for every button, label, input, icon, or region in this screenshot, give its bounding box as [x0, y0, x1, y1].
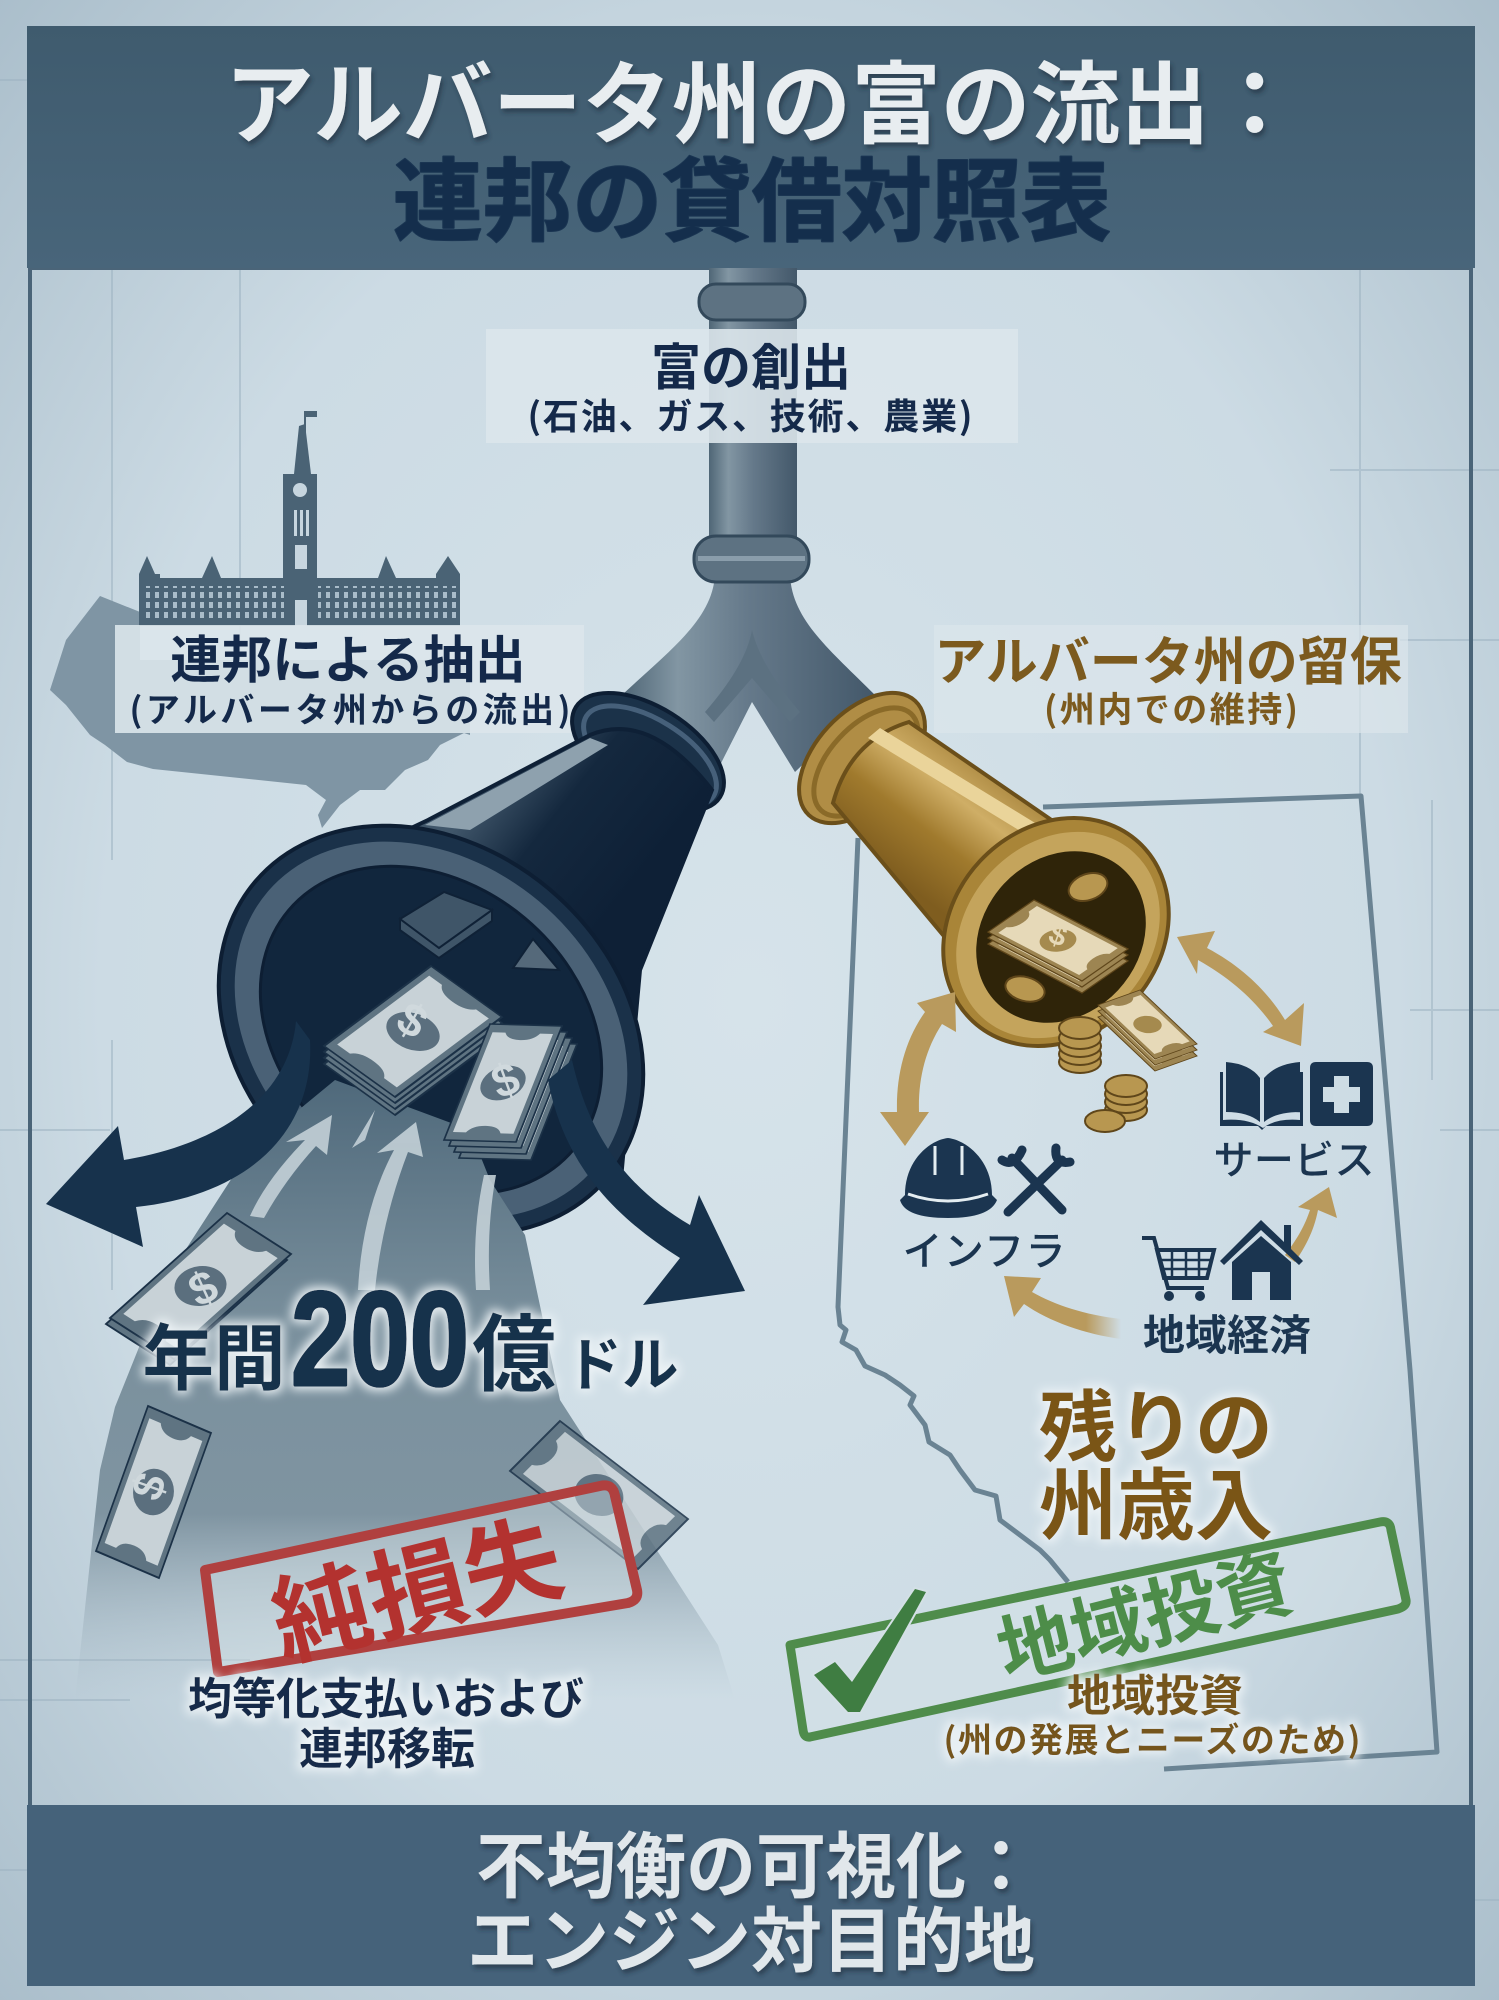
title line 2: 連邦の貸借対照表	[393, 129, 1111, 259]
amount: 20 billion dollars per year: 億	[472, 1288, 556, 1409]
left outflow arrow	[46, 1021, 310, 1247]
label: alberta retention	[934, 620, 1408, 733]
icon: medical cross	[1310, 1062, 1373, 1126]
caption: equalization: 連邦移転	[299, 1713, 475, 1777]
gold alberta pipe	[775, 670, 1215, 1132]
pipe body	[260, 729, 712, 1190]
services icons	[1220, 1062, 1373, 1130]
stamp: regional investment: 地域投資	[985, 1523, 1302, 1701]
caption: regional investment	[944, 1660, 1360, 1762]
heading: remaining revenue: 残りの	[1039, 1366, 1273, 1478]
icon: book	[1220, 1062, 1303, 1130]
check mark	[814, 1589, 926, 1712]
right outflow arrow	[548, 1060, 745, 1305]
falling bills: $	[180, 1259, 226, 1317]
gold pipe mouth	[897, 772, 1215, 1092]
label: wealth creation	[486, 328, 1018, 443]
gold cash stack: $	[1044, 917, 1072, 954]
icon: wrench	[1002, 1148, 1070, 1212]
alberta outline	[838, 796, 1437, 1769]
heading: remaining revenue: 州歳入	[1039, 1444, 1273, 1556]
canada map silhouette	[50, 596, 470, 828]
falling bills: $	[122, 1467, 177, 1506]
label: federal extraction: (アルバータ州からの流出)	[130, 683, 570, 732]
header banner	[27, 26, 1475, 268]
amount: 20 billion dollars per year: 200	[291, 1265, 469, 1414]
amount: 20 billion dollars per year: 年間	[142, 1300, 286, 1405]
gold cycle arrows	[880, 931, 1337, 1262]
central wealth pipe	[622, 268, 875, 775]
hat brim detail	[908, 1146, 988, 1201]
icon: cart	[1142, 1238, 1214, 1301]
dark curved arrows	[46, 1021, 745, 1305]
label: alberta retention: (州内での維持)	[1044, 682, 1298, 733]
bills in mouth: $	[484, 1051, 526, 1109]
icon: house	[1220, 1220, 1303, 1300]
caption: equalization: 均等化支払いおよび	[188, 1663, 584, 1727]
frame	[30, 268, 1471, 1808]
stamp: net loss: 純損失	[255, 1479, 575, 1688]
caption: regional investment: 地域投資	[1067, 1660, 1243, 1724]
economy label: 地域経済	[1143, 1302, 1311, 1363]
arrow up right	[1285, 1187, 1337, 1262]
dark federal pipe	[137, 669, 744, 1319]
icon: hard hat	[900, 1138, 997, 1218]
label: wealth creation: (石油、ガス、技術、農業)	[528, 388, 972, 440]
arrow bottom left	[1004, 1276, 1121, 1339]
light upward arrows	[250, 1110, 496, 1290]
label: wealth creation: 富の創出	[651, 328, 851, 400]
footer line 2: エンジン対目的地	[467, 1885, 1035, 1987]
money beam	[75, 1080, 735, 1700]
parliament building	[139, 411, 460, 626]
caption: equalization	[188, 1663, 584, 1777]
services label: サービス	[1214, 1128, 1374, 1186]
infrastructure icons	[900, 1138, 1070, 1218]
economy icons	[1142, 1220, 1303, 1301]
gold pipe collar	[775, 670, 949, 846]
amount: 20 billion dollars per year	[142, 1265, 678, 1414]
arrow left	[880, 992, 956, 1146]
title line 1: アルバータ州の富の流出：	[224, 32, 1300, 162]
label: federal extraction	[115, 619, 584, 733]
amount: 20 billion dollars per year: ドル	[566, 1318, 678, 1402]
arrow top right	[1177, 931, 1304, 1046]
label: federal extraction: 連邦による抽出	[170, 619, 526, 693]
stamp: regional investment	[790, 1522, 1406, 1737]
pipe mouth	[137, 741, 725, 1319]
coin stacks	[1059, 1017, 1147, 1132]
gold pipe body	[833, 722, 1140, 1010]
pipe collar	[552, 669, 744, 835]
bills in mouth: $	[388, 991, 437, 1049]
footer line 1: 不均衡の可視化：	[476, 1808, 1036, 1913]
heading: remaining revenue	[1039, 1366, 1273, 1556]
infrastructure label: インフラ	[902, 1219, 1066, 1277]
bills in mouth	[324, 892, 577, 1160]
falling bills	[96, 1213, 688, 1578]
gold small cash	[1098, 990, 1197, 1071]
footer banner	[27, 1805, 1475, 1987]
gold cash stack	[988, 900, 1128, 993]
label: alberta retention: アルバータ州の留保	[934, 620, 1402, 695]
caption: regional investment: (州の発展とニーズのため)	[944, 1713, 1360, 1762]
